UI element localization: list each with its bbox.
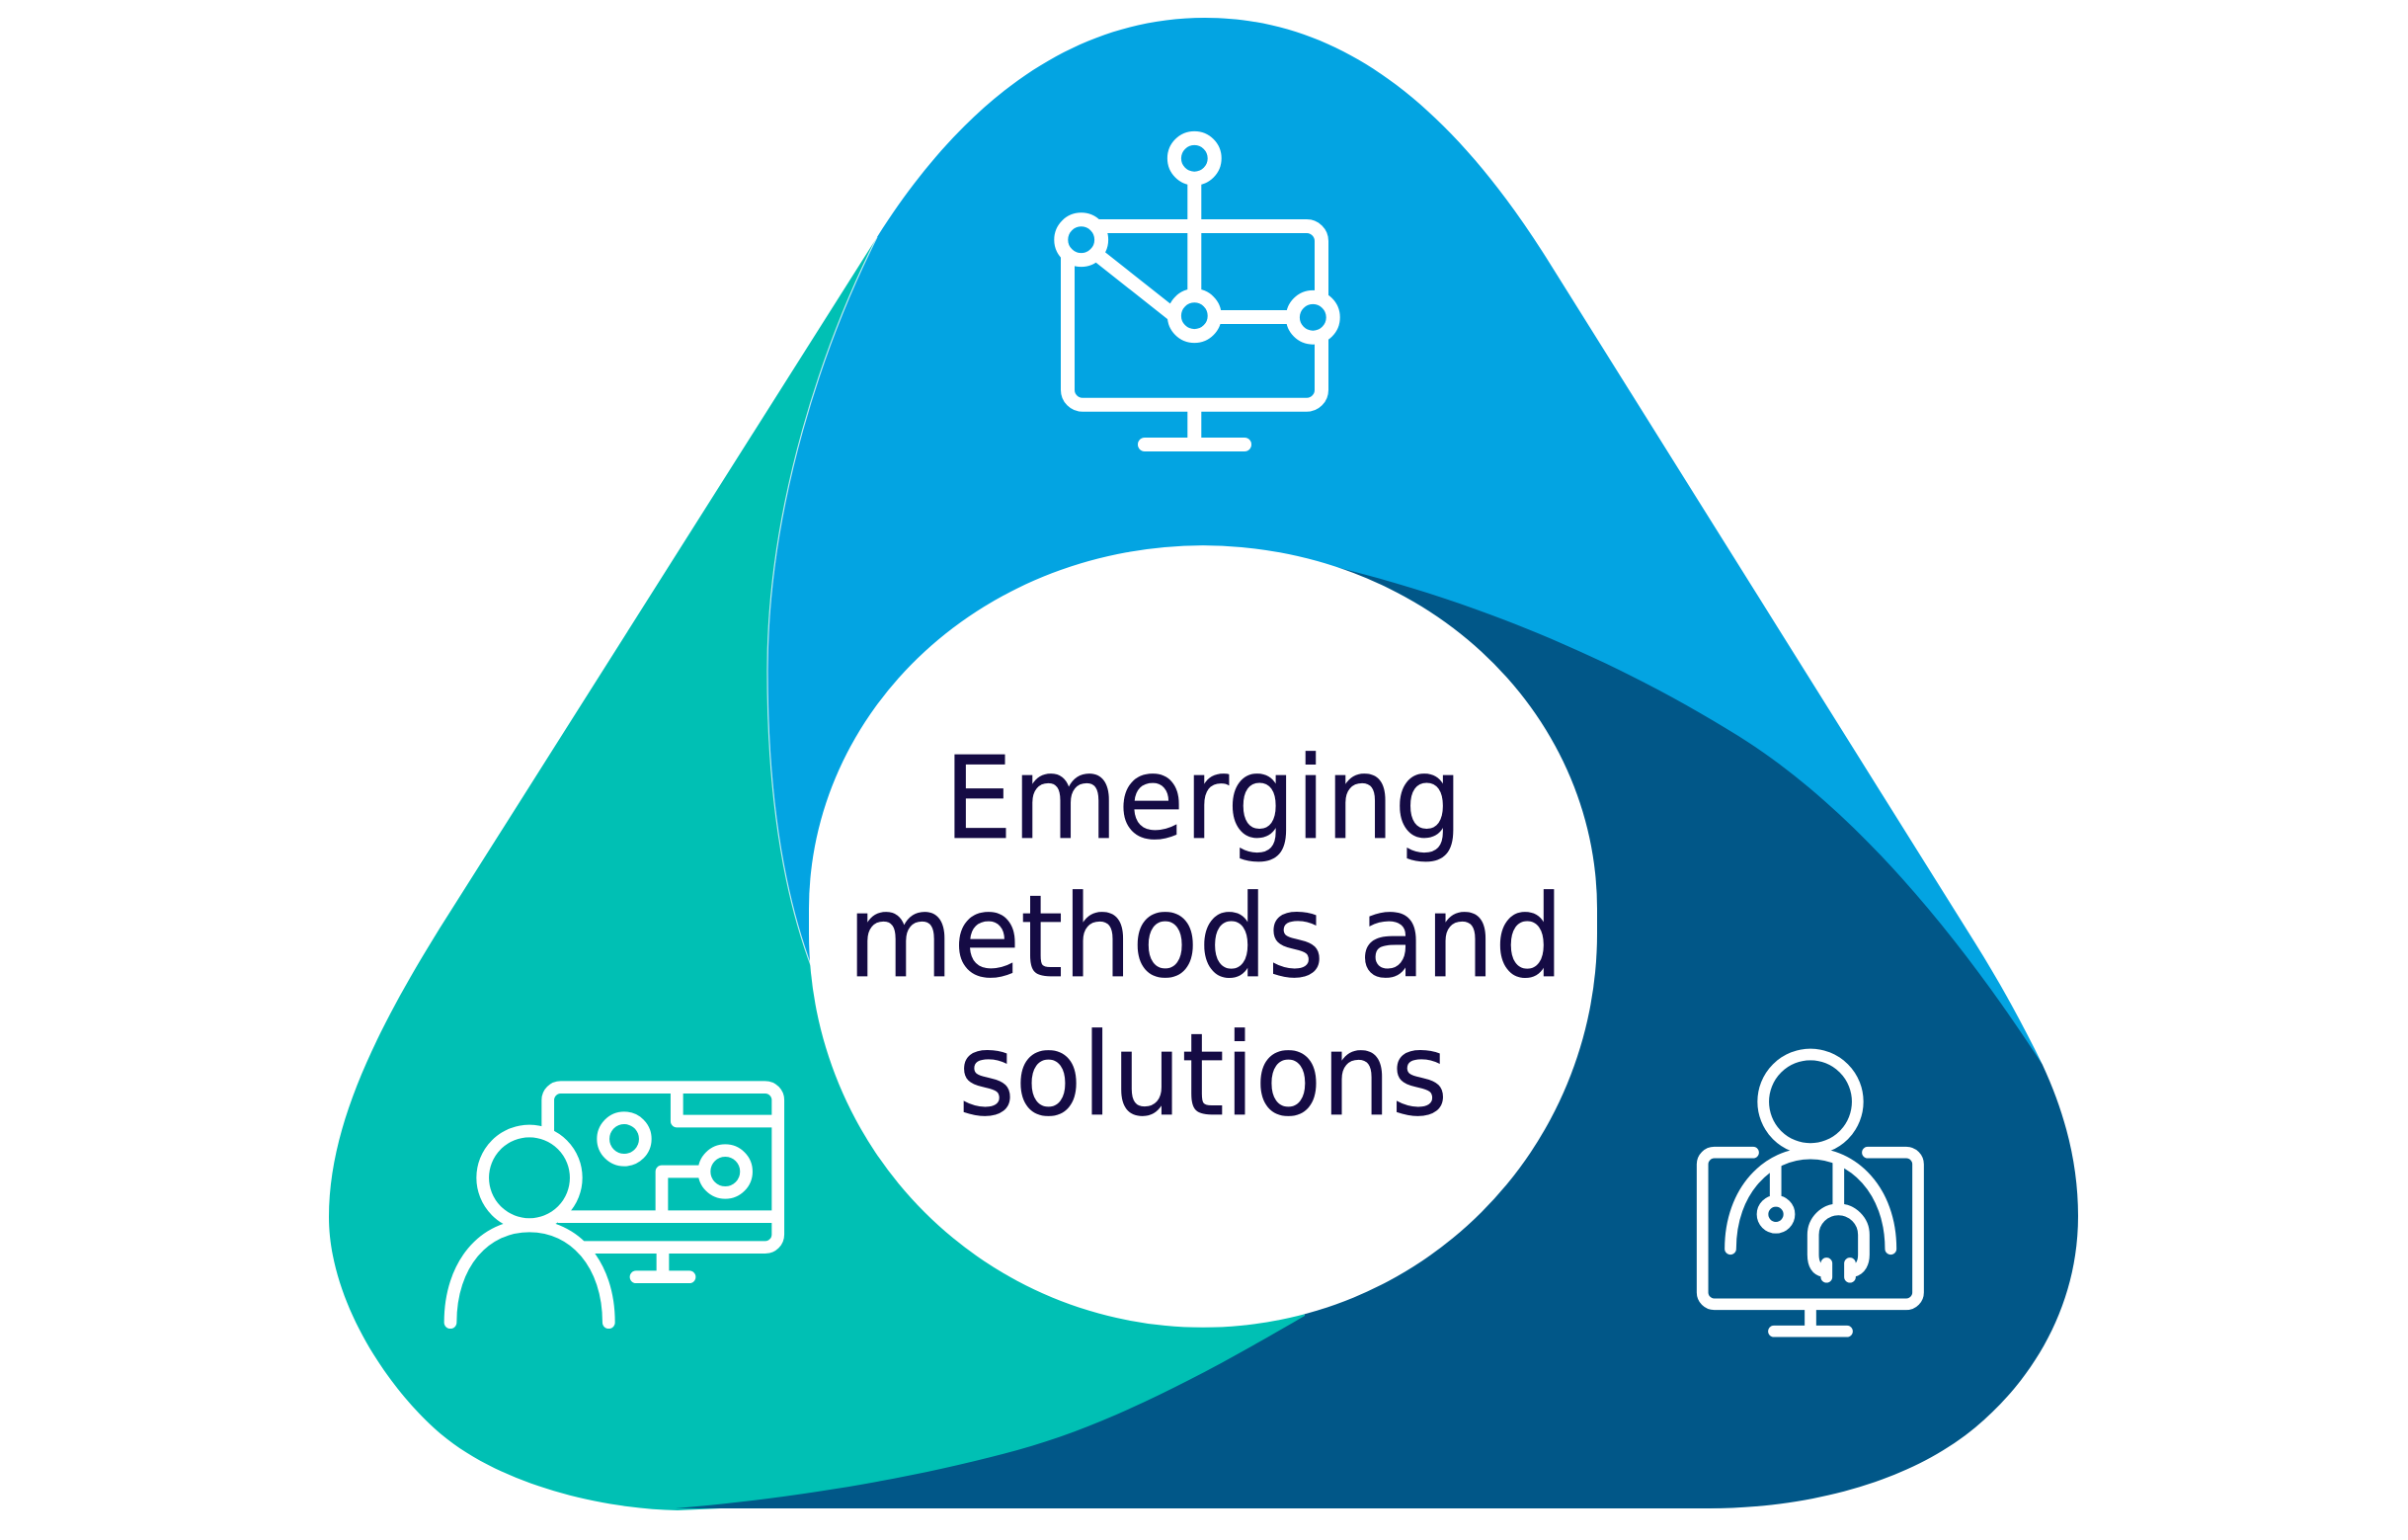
icon: doctor on monitor <box>1703 1055 1918 1332</box>
icon: person at dashboard monitor <box>450 1088 778 1323</box>
segment: dark blue <box>676 562 2078 1508</box>
central title: solutions <box>958 1010 1448 1142</box>
icon: monitor with network nodes <box>1061 138 1333 445</box>
segment: teal <box>329 237 1305 1510</box>
central title <box>847 733 1564 1142</box>
segment: light blue <box>767 18 2043 1065</box>
rounded triangle of three swirling segments <box>329 18 2078 1510</box>
central title: Emerging <box>944 733 1463 865</box>
centre white circle <box>809 545 1597 1328</box>
central title: methods and <box>847 871 1564 1004</box>
